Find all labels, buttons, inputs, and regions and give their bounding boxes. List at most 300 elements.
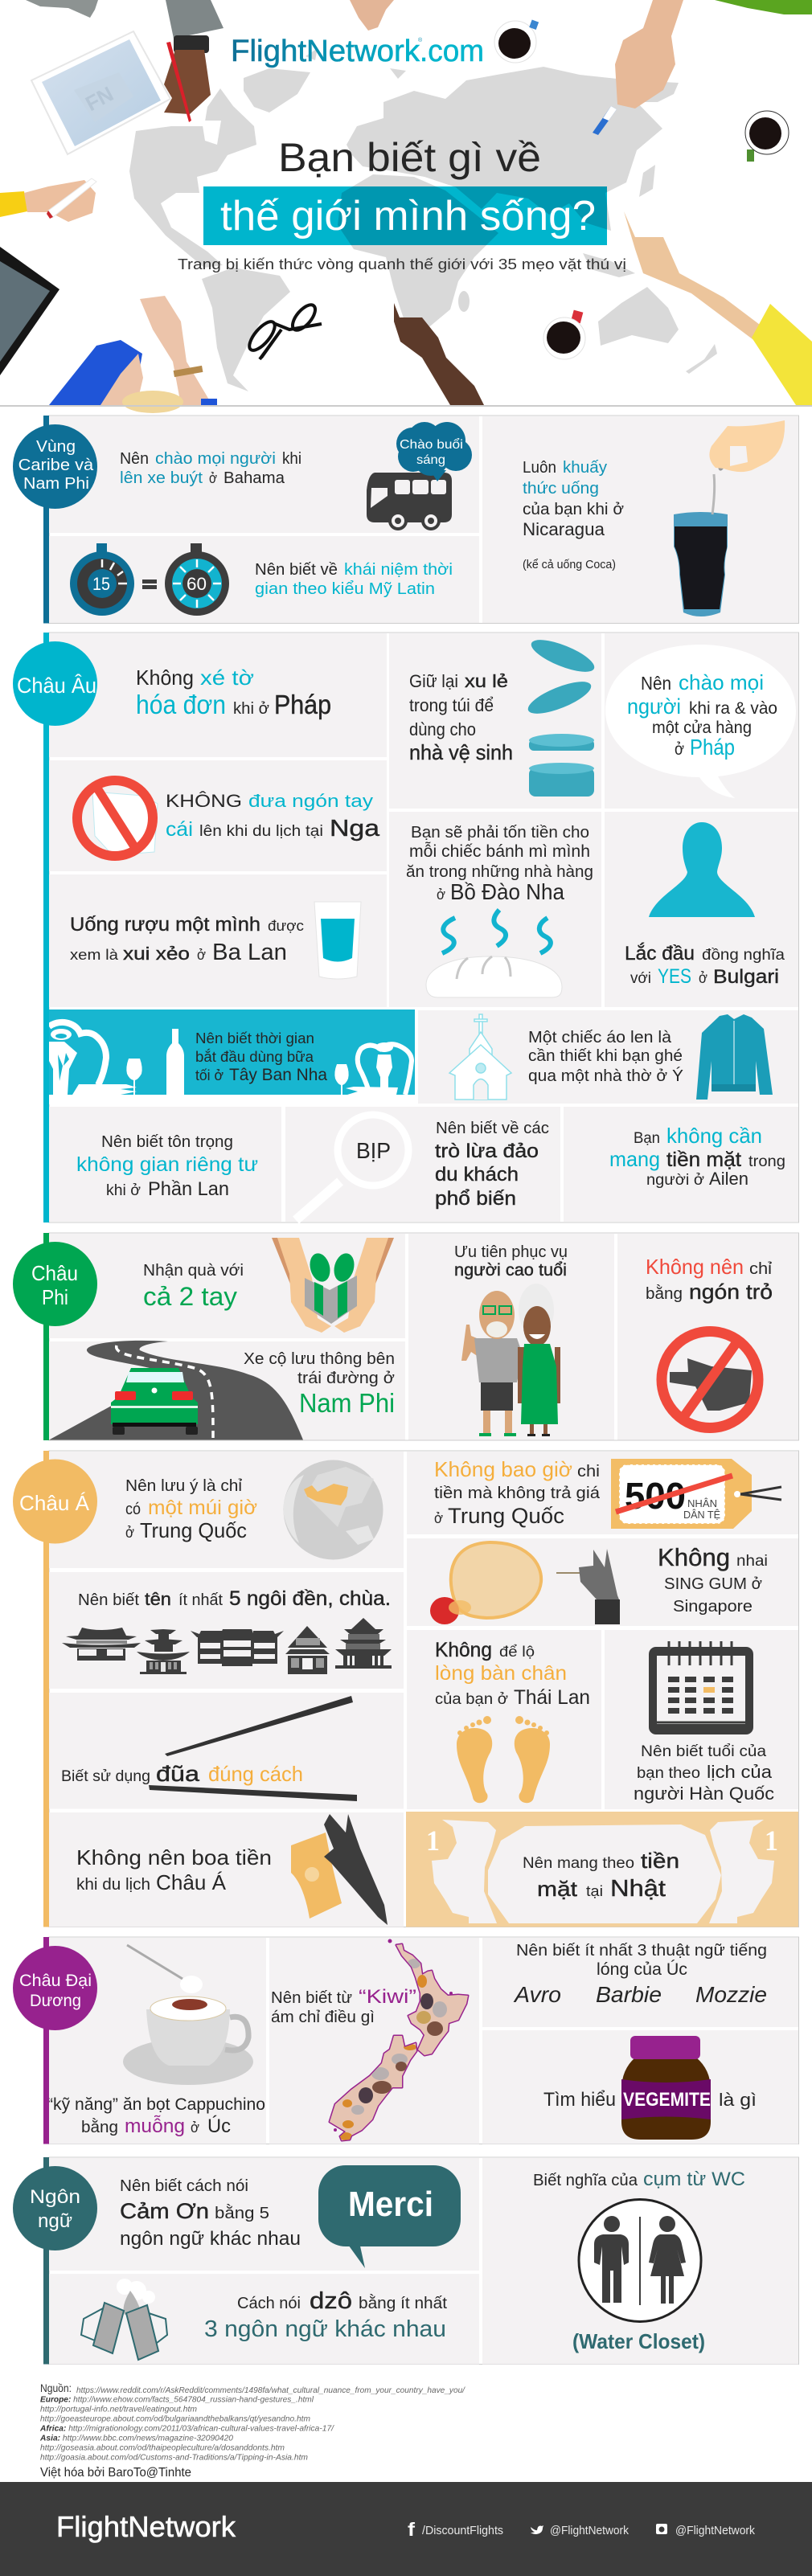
section badge (13, 1460, 97, 1543)
tip text: Lắc đầu (625, 943, 695, 964)
right arm with yellow sleeve (624, 211, 812, 405)
tip text: trong (748, 1153, 785, 1170)
hudson bay cutout (202, 121, 221, 145)
tip text: “kỹ năng” ăn bọt Cappuchino (47, 2095, 265, 2114)
tip text: người (627, 694, 681, 719)
tip text (255, 561, 453, 598)
tablet (31, 31, 170, 154)
tip text: Nhận quà với (143, 1262, 244, 1280)
tip text: Nên biết ít nhất 3 thuật ngữ tiếng (516, 1942, 767, 1960)
tip text (271, 1986, 416, 2026)
tip text: mỗi chiếc bánh mì mình (409, 842, 590, 861)
tip text: Pháp (274, 690, 331, 719)
banknote right ornament (709, 1820, 774, 1923)
tip text (543, 2089, 757, 2111)
tip text: Nên biết tôn trọng (101, 1133, 233, 1151)
speech cloud: Chào buổi (400, 437, 463, 452)
tip text: Nên biết tuổi của (641, 1743, 766, 1760)
icon: price tag: 500 (625, 1475, 686, 1517)
sources (39, 2381, 465, 2480)
tip text (143, 1262, 244, 1311)
twitter link: @FlightNetwork (550, 2524, 629, 2537)
tip text: nhà vệ sinh (409, 740, 513, 764)
tip text (533, 2169, 745, 2190)
tip text: “Kiwi” (359, 1986, 416, 2008)
tip text: YES (658, 965, 691, 988)
section bar (43, 416, 49, 624)
tip text: thức uống (523, 480, 599, 498)
tip text: Nên biết về các (436, 1120, 549, 1137)
tip text (523, 1849, 679, 1902)
tip text: trái đường ở (297, 1370, 395, 1387)
tip text: chỉ (749, 1260, 773, 1278)
tip text: 3 ngôn ngữ khác nhau (204, 2316, 446, 2342)
panel: greet in shops (605, 633, 798, 809)
icon: hands with gift (272, 1238, 394, 1333)
tip text: bằng (646, 1284, 683, 1303)
slang words: Avro (513, 1982, 561, 2007)
tip text: cả 2 tay (143, 1282, 237, 1311)
tip text: Nên (120, 450, 149, 468)
equals sign (142, 579, 157, 589)
tip text: hóa đơn (136, 690, 226, 719)
tip text: người cao tuổi (454, 1261, 567, 1280)
tip text: khi ở (233, 700, 269, 718)
banknote left ornament (432, 1820, 497, 1923)
tip text: Bạn sẽ phải tốn tiền cho (411, 824, 589, 842)
icon: price tag: NHÂN (687, 1497, 717, 1509)
icon: stopwatch 60: 60 (187, 574, 207, 594)
icon: restroom sign (579, 2199, 701, 2321)
tip text: bắt đầu dùng bữa (195, 1048, 314, 1065)
section badge: Ngôn (30, 2186, 80, 2208)
tip text: xem là (70, 947, 119, 963)
facebook link: f (408, 2519, 415, 2540)
tip text: lên xe buýt (120, 469, 203, 487)
tip text: Cảm Ơn (120, 2199, 209, 2223)
dark hand (394, 303, 484, 405)
tip text: lên khi du lịch tại (199, 823, 323, 840)
tip text: Pháp (690, 735, 735, 760)
panel: receipts in France (49, 633, 387, 757)
tip text: ở (197, 947, 206, 963)
icon: shot glass (314, 902, 361, 979)
tip text: du khách (435, 1164, 519, 1186)
panel: serve elders first (408, 1234, 614, 1440)
tip text: tại (586, 1883, 603, 1899)
top right arm with blue marker (593, 0, 683, 135)
section: Vùng Caribe và Nam Phi (13, 416, 799, 624)
section badge (13, 424, 97, 509)
sources: https://www.reddit.com/r/AskReddit/comments/1498fa/what_cultural_nuance_from_your_country_have_you/ (76, 2386, 465, 2395)
icon: banknote (291, 1833, 342, 1919)
panel: no cash in Ireland (564, 1107, 798, 1222)
tip text: Ailen (709, 1169, 748, 1189)
tip text: Nga (330, 816, 380, 842)
coffee cup bottom (543, 310, 585, 359)
tip text: nhai (736, 1553, 768, 1570)
tip text (658, 1543, 768, 1616)
tip text: Bulgari (713, 966, 779, 988)
icon: temple one (62, 1628, 141, 1661)
tip text: dùng cho (409, 719, 476, 739)
top-left sleeve (26, 0, 98, 18)
tip text: Bahama (224, 469, 285, 487)
tip text: Ba Lan (212, 940, 287, 965)
tip text: Tìm hiểu (543, 2089, 616, 2111)
icon: beer mugs (81, 2279, 167, 2360)
tip text: trong túi để (409, 695, 494, 715)
tip text: khuấy (563, 459, 607, 477)
panel: thumb in Russia (49, 760, 387, 871)
tip text (61, 1762, 303, 1786)
panel: cash in Japan (406, 1812, 798, 1927)
sources: Việt hóa bởi BaroTo@Tinhte (40, 2466, 191, 2480)
bottom-left person (49, 296, 217, 413)
tip text: Nên biết cách nói (120, 2177, 248, 2195)
tip text: Xe cộ lưu thông bên (244, 1350, 395, 1368)
section badge: Nam Phi (23, 475, 89, 493)
section badge (13, 641, 97, 726)
tip text: người Hàn Quốc (634, 1784, 774, 1804)
tip text: ít nhất (178, 1591, 223, 1609)
tip text: ở (434, 1510, 443, 1526)
tip text: tiền mà không trả giá (434, 1485, 601, 1502)
tip text: được (268, 918, 304, 934)
tip text: Không nên boa tiền (76, 1845, 272, 1870)
section: Châu Âu (13, 633, 799, 1222)
icon: head silhouette (649, 822, 755, 917)
panel: gifts with two hands (49, 1234, 405, 1338)
icon: pinching hand (556, 1549, 620, 1624)
sources: http://goseasia.about.com/od/thaipeopleculture/a/dosanddonts.htm (40, 2443, 285, 2453)
sources: Europe: http://www.ehow.com/facts_5647804_russian-hand-gestures_.html (40, 2395, 314, 2405)
tip text: là gì (719, 2090, 757, 2110)
section badge: Châu Á (19, 1491, 90, 1515)
tip text: một múi giờ (148, 1497, 257, 1519)
panel: tourist scams (285, 1107, 560, 1222)
tip text (70, 914, 304, 965)
section badge: Caribe và (18, 457, 94, 474)
tip text: cái (166, 818, 193, 841)
tip text: xé tờ (200, 666, 254, 690)
icon: dollar steam (442, 910, 551, 953)
tip text: đồng nghĩa (702, 947, 785, 964)
tip text: (kể cả uống Coca) (523, 558, 616, 571)
tip text: tên (145, 1589, 171, 1609)
icon: cardigan (696, 1014, 773, 1100)
header (0, 0, 812, 413)
icon: church (449, 1014, 511, 1100)
banknote corners: 1 (426, 1824, 440, 1857)
section badge: Dương (30, 1992, 81, 2010)
tip text: không cần (666, 1124, 762, 1148)
footer (0, 2482, 812, 2576)
road (49, 1341, 303, 1440)
tip text: Trung Quốc (140, 1518, 247, 1542)
slang words: Mozzie (695, 1982, 767, 2007)
tip text: Không bao giờ (434, 1457, 572, 1481)
tip text: Nên biết về (255, 561, 338, 579)
section badge (13, 1946, 97, 2030)
tip text: lóng của Úc (597, 1960, 687, 1979)
section bar (43, 2157, 49, 2365)
tip text: Nam Phi (299, 1388, 395, 1418)
tip text: Nhật (610, 1876, 666, 1902)
sources: http://goeasteurope.about.com/od/bulgariaandthebalkans/qt/yesandno.htm (40, 2414, 310, 2424)
tip text: ngôn ngữ khác nhau (120, 2228, 301, 2250)
title band: thế giới mình sống? (220, 193, 596, 240)
tip text: Úc (207, 2115, 231, 2137)
tip text: trò lừa đảo (435, 1141, 539, 1162)
tip text: Uống rượu một mình (70, 914, 260, 936)
tip text: với (630, 970, 651, 987)
panel: Korean age (605, 1630, 798, 1809)
tip text: Giữ lại (409, 671, 458, 691)
panel: WC (482, 2158, 798, 2365)
tip text (435, 1639, 590, 1709)
panel: no tipping (49, 1812, 404, 1927)
icon: green car (111, 1368, 198, 1435)
panel: privacy in Finland (49, 1107, 281, 1222)
icon: globe (283, 1460, 383, 1559)
panel: bargain (407, 1452, 798, 1534)
tip text: bằng ít nhất (359, 2294, 447, 2312)
left hand yellow sleeve with marker (0, 178, 96, 222)
tip text (120, 450, 301, 487)
slang words: Barbie (596, 1982, 662, 2007)
tip text: mặt (537, 1877, 578, 1901)
icon: magnifier: BỊP (356, 1138, 391, 1163)
title line one: Bạn biết gì về (278, 135, 541, 180)
subtitle: Trang bị kiến thức vòng quanh thế giới với 35 mẹo vặt thú vị (178, 256, 626, 272)
tip text (646, 1255, 773, 1304)
tip text: tiền (641, 1849, 679, 1873)
section bar (43, 633, 49, 1222)
banknote corners (426, 1824, 778, 1857)
icon: jar: VEGEMITE (623, 2089, 711, 2111)
tip text: đưa ngón tay (248, 791, 373, 811)
tip text: lòng bàn chân (435, 1662, 567, 1685)
tip text: Phần Lan (148, 1178, 229, 1200)
tip text (120, 2177, 301, 2250)
tip text (195, 1030, 327, 1084)
banknote centre (488, 1824, 721, 1923)
tip text: cụm từ WC (643, 2169, 745, 2190)
panel: soles of feet (407, 1630, 601, 1809)
tip text: Tây Ban Nha (229, 1066, 327, 1084)
tip text: khi ở (106, 1182, 141, 1199)
tip text: ăn trong những nhà hàng (406, 863, 593, 881)
tip text (47, 2095, 265, 2137)
tip text: ở (699, 970, 707, 987)
icon: temple five (335, 1618, 392, 1669)
panel: keep coins (389, 633, 601, 809)
tip text: tối ở (195, 1067, 224, 1083)
tip text: để lộ (499, 1644, 535, 1660)
laptop (0, 247, 59, 375)
tip text: Bồ Đào Nha (450, 879, 564, 904)
icon: right chair (346, 1042, 412, 1095)
tip text: mang (609, 1147, 660, 1171)
speech bubble (605, 645, 796, 798)
tip text: Biết nghĩa của (533, 2172, 638, 2189)
tip text: cần thiết khi bạn ghé (528, 1047, 683, 1065)
tip text: Nên biết (78, 1591, 139, 1609)
panel: chopsticks (49, 1693, 404, 1808)
tip text (627, 670, 777, 760)
tip text: ngón trỏ (689, 1280, 773, 1304)
tip text (136, 666, 331, 719)
tip text (406, 824, 593, 904)
tip text: ở (209, 470, 217, 486)
section badge: Châu (31, 1261, 78, 1285)
icon: stopwatch 15 (70, 543, 134, 616)
panel: cheers (49, 2274, 479, 2365)
tip text: người ở (646, 1172, 704, 1189)
tip text: khi (282, 450, 301, 468)
speech bubble: Merci: Merci (348, 2185, 433, 2224)
arm with watch and red pencil (164, 0, 224, 122)
icon: calendar (649, 1641, 753, 1734)
tip text: KHÔNG (166, 791, 242, 811)
icon: left chair (49, 1022, 137, 1095)
tip text: xu lẻ (465, 671, 508, 691)
panel: thank you (49, 2158, 479, 2271)
tip text: khi du lịch (76, 1876, 150, 1894)
world map (129, 48, 717, 391)
tip text (76, 1133, 258, 1200)
tip text: chào mọi người (155, 450, 276, 468)
section: Châu Phi (13, 1233, 799, 1440)
section badge (13, 2166, 97, 2250)
tip text (516, 1942, 767, 1979)
tip text (528, 1029, 683, 1085)
tip text: ám chỉ điều gì (271, 2009, 375, 2026)
icon: glass with spoon and hand (674, 420, 785, 616)
coffee cup right (745, 111, 789, 162)
icon: stopwatch 60 (165, 543, 229, 616)
tip text: phổ biến (435, 1188, 516, 1210)
banknote corners: 1 (765, 1824, 778, 1857)
tip text: chào mọi (679, 670, 764, 694)
tip text (609, 1124, 785, 1189)
section: Châu Đại Dương (13, 1937, 799, 2146)
tip text (625, 943, 785, 988)
tip text: Nên (641, 673, 671, 694)
tip text: bằng (81, 2118, 118, 2136)
tip text: 5 ngôi đền, chùa. (229, 1587, 391, 1610)
speech cloud: sáng (416, 453, 445, 467)
tip text (634, 1743, 774, 1804)
tip text (434, 1457, 601, 1528)
section: Châu Á (13, 1451, 799, 1927)
icon: stopwatch 15: 15 (92, 574, 110, 594)
tip text: đúng cách (208, 1762, 303, 1786)
icon: bread (426, 956, 562, 997)
tip text: của bạn khi ở (523, 501, 624, 518)
tip text: ở (191, 2119, 199, 2136)
tip text (409, 671, 513, 764)
facebook link (408, 2519, 503, 2540)
tip text: bằng 5 (215, 2204, 269, 2222)
panel: greet bus driver (49, 416, 479, 533)
instagram link: @FlightNetwork (675, 2524, 755, 2537)
icon: New Zealand of faces (328, 1939, 470, 2141)
panel: Aussie slang (482, 1938, 798, 2027)
tip text: Bạn (634, 1130, 660, 1147)
panel: drinking alone in Poland (49, 874, 387, 1007)
icon: hand (324, 1814, 388, 1925)
tip text: ở (437, 887, 445, 903)
tip text: Biết sử dụng (61, 1768, 150, 1785)
logo: FlightNetwork (231, 35, 420, 68)
panel: nod yes in Bulgaria (605, 812, 798, 1007)
icon: no sign over hand (77, 780, 158, 856)
tip text: Nên biết thời gian (195, 1030, 314, 1046)
speech bubble: Merci (318, 2165, 461, 2268)
icon: no pointing (662, 1331, 758, 1427)
icon: cappuccino cup (123, 1945, 253, 2085)
icon: price tag (611, 1459, 781, 1529)
icon: temple three (191, 1629, 284, 1666)
tip text: Nên lưu ý là chỉ (125, 1477, 243, 1495)
section bar (43, 1937, 49, 2144)
tip text: dzô (310, 2288, 352, 2314)
logo: .com (420, 35, 484, 68)
section: Ngôn ngữ (13, 2157, 799, 2365)
tip text: khi ra & vào (689, 699, 777, 718)
footer logo: FlightNetwork (56, 2510, 236, 2543)
coffee cup top (494, 20, 539, 63)
sources: Asia: http://www.bbc.com/news/magazine-32090420 (39, 2434, 233, 2443)
section bar (43, 1451, 49, 1927)
speech cloud (396, 422, 472, 481)
panel: dinner in Spain (49, 1010, 417, 1104)
panel: Vegemite (482, 2030, 798, 2144)
tip text: bạn theo (637, 1765, 700, 1782)
top center hand (350, 0, 394, 31)
tip text: Không nên (646, 1255, 744, 1279)
section badge: ngữ (38, 2210, 72, 2232)
section bar (43, 1233, 49, 1440)
panel: Kiwi (269, 1937, 479, 2146)
panel: sweater at church in Italy (418, 1010, 798, 1104)
icon: gum bubble and lips (430, 1542, 541, 1624)
tip text: Không (658, 1543, 730, 1571)
icon: elderly couple (461, 1284, 560, 1436)
tip text: Cách nói (237, 2295, 301, 2312)
tip text: xui xẻo (123, 944, 190, 964)
icon: coins (524, 633, 598, 797)
tip text: SING GUM ở (664, 1575, 762, 1593)
tip text: Trung Quốc (448, 1504, 564, 1528)
tip text: một cửa hàng (652, 719, 752, 737)
icon: magnifier (296, 1115, 408, 1220)
tip text: Singapore (673, 1598, 753, 1616)
tip text (204, 2288, 447, 2342)
tip text (523, 459, 624, 571)
icon: bus (367, 473, 452, 530)
tip text: Luôn (523, 459, 556, 477)
tip text: Không (435, 1639, 492, 1661)
icon: price tag: DÂN TỆ (683, 1509, 720, 1521)
panel: chewing gum (407, 1538, 798, 1626)
tip text: ở (125, 1525, 134, 1542)
tip text: khái niệm thời (344, 561, 453, 579)
tip text: chi (577, 1463, 600, 1480)
white table base (49, 1095, 417, 1104)
